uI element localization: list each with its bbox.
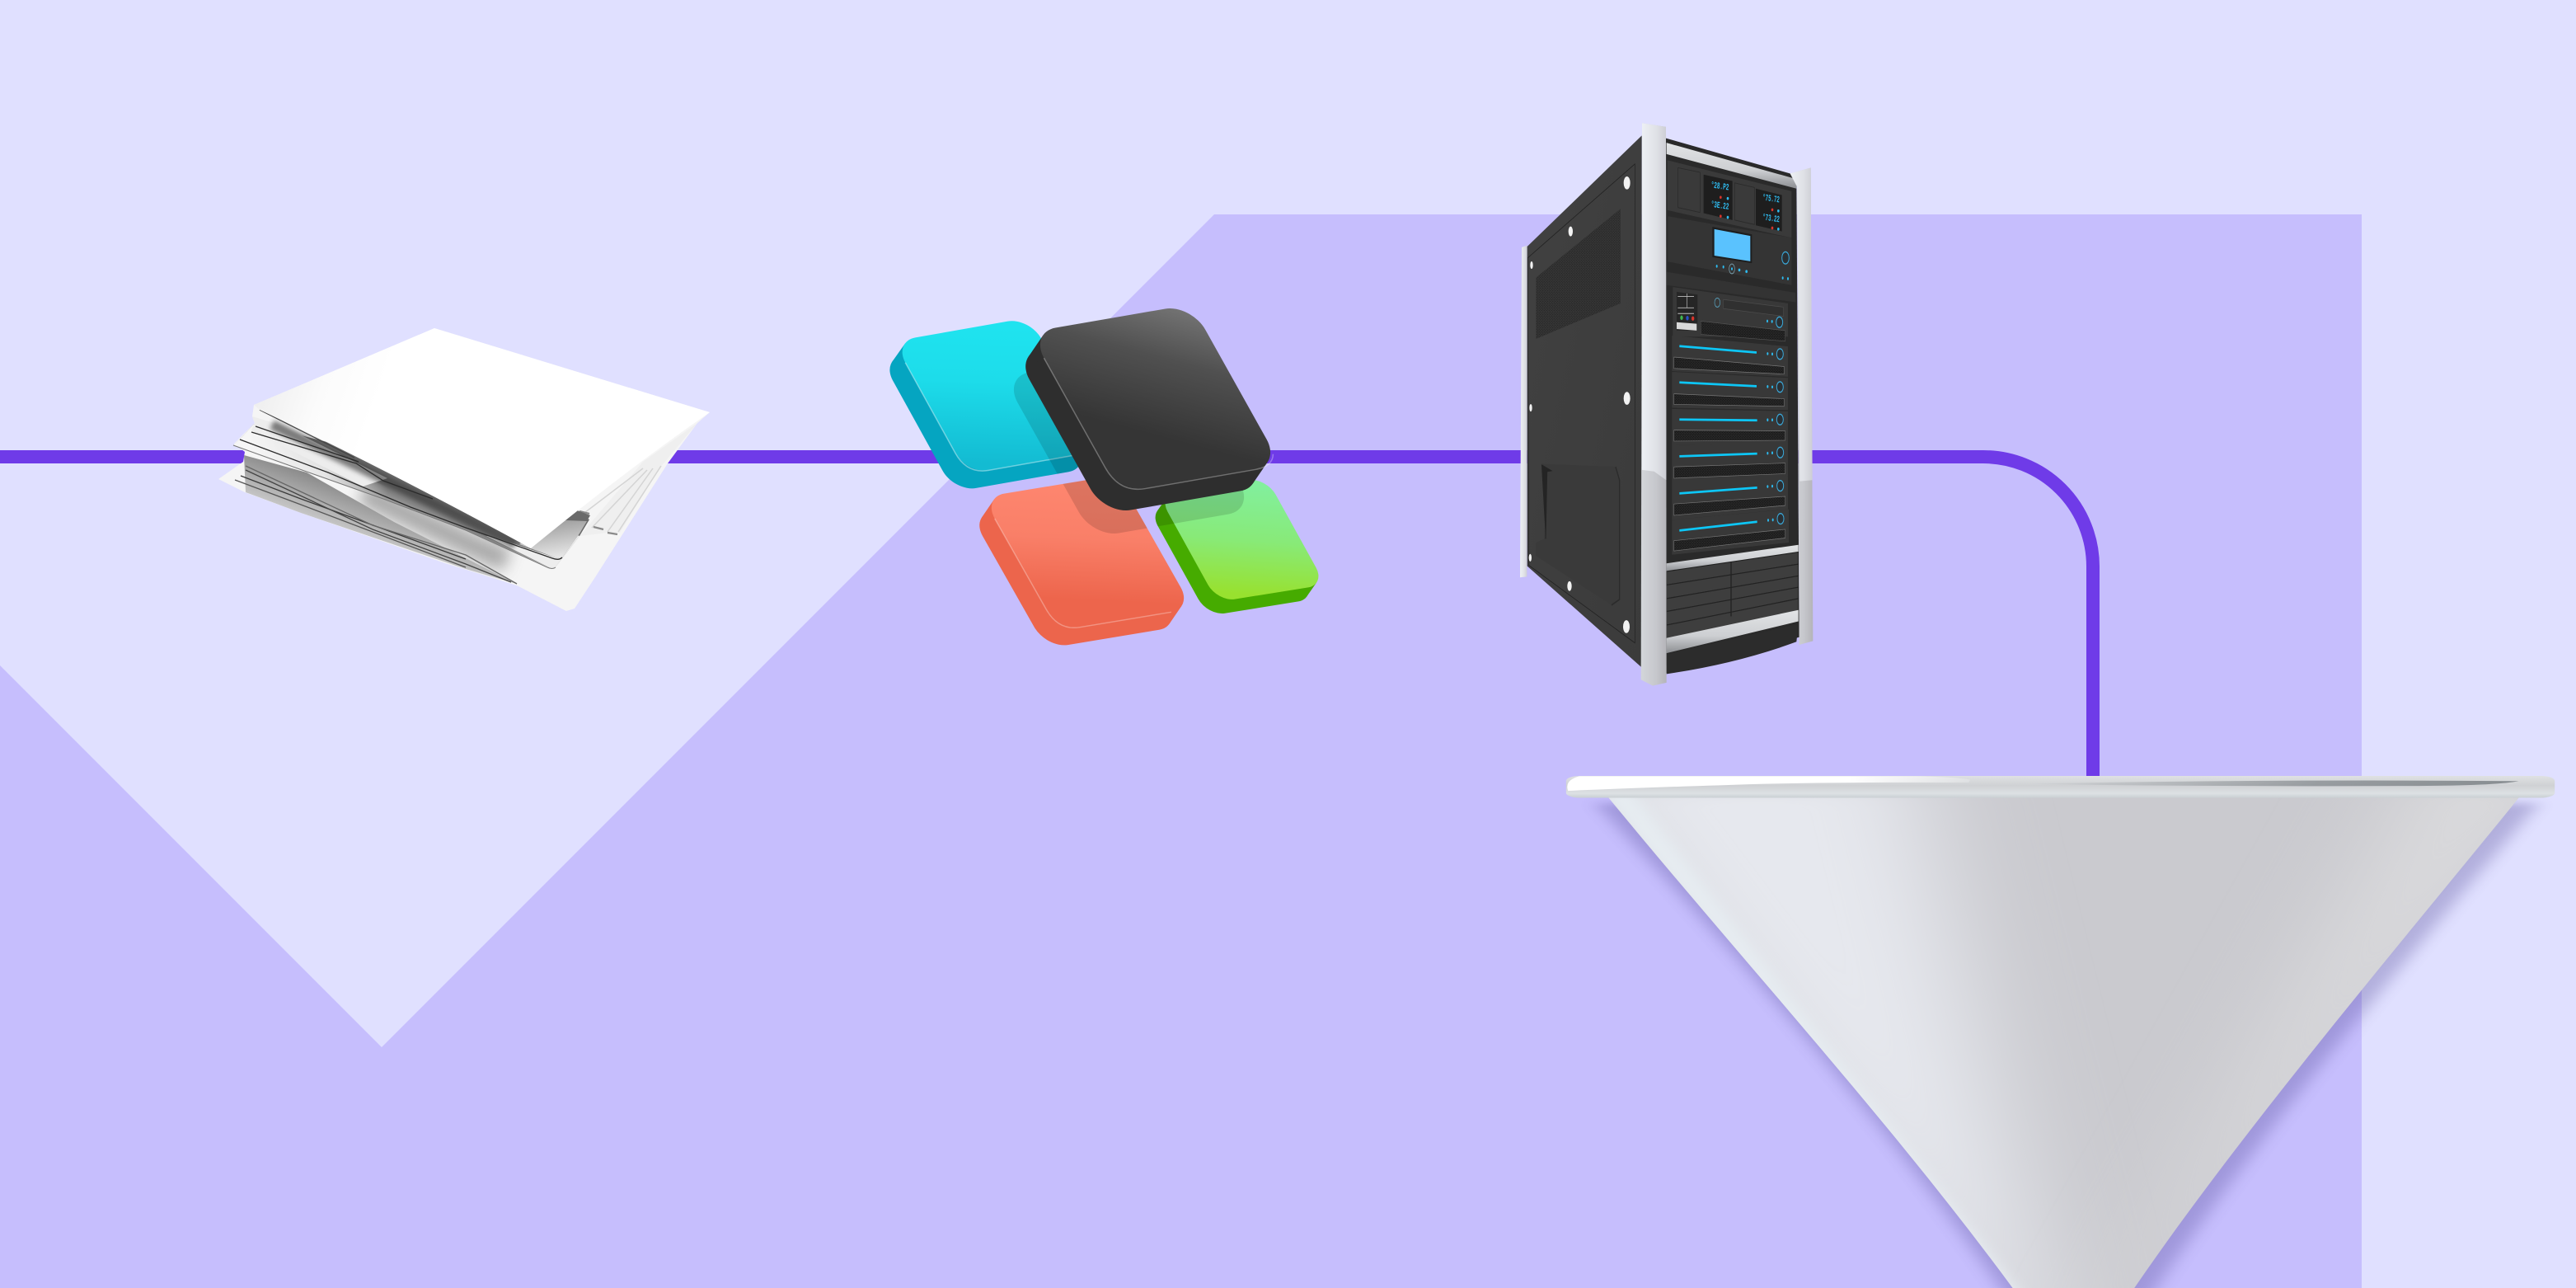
paper stack base silhouette	[218, 328, 710, 611]
LCD control panel	[1668, 216, 1791, 285]
rack base	[1667, 624, 1799, 674]
side panel inset border	[1527, 164, 1635, 643]
server blade 4	[1672, 443, 1788, 482]
orange tile	[963, 475, 1201, 648]
lower pack edge lines	[235, 466, 517, 584]
icon: funnel	[1566, 776, 2555, 1288]
server blade 1	[1672, 336, 1788, 377]
rack divider band	[1667, 272, 1795, 302]
cone right highlight	[2229, 798, 2518, 1158]
lower grey sheet pack	[244, 455, 517, 584]
server blade 3	[1672, 409, 1788, 445]
server blade 6	[1672, 510, 1789, 555]
background: violet zig-zag shape	[0, 214, 2362, 1288]
top paper sheet	[254, 328, 710, 548]
rim white highlight	[1567, 776, 1970, 791]
digital meter left	[1704, 175, 1733, 220]
cast shadow of the black tile	[1014, 373, 1244, 534]
pipeline connector line	[0, 457, 2093, 783]
digital meter left: °3E.22	[1710, 200, 1729, 212]
bottom silver bar	[1667, 610, 1799, 653]
shadow under the top sheet	[272, 425, 515, 544]
icon: server rack	[1520, 123, 1813, 686]
meter panel	[1668, 160, 1791, 237]
right side fanned sheets	[579, 423, 697, 536]
digital meter left: °28.P2	[1710, 180, 1729, 193]
rack rear pillar	[1520, 246, 1527, 577]
front right pillar	[1790, 167, 1813, 645]
rack side panel	[1527, 135, 1642, 668]
black tile	[1006, 304, 1291, 515]
lower silver bar	[1667, 545, 1799, 571]
cone left edge sheen	[1602, 794, 2025, 1288]
rim dark reflection	[2021, 781, 2519, 786]
front left pillar	[1641, 123, 1667, 686]
upper left stacked sheet tips	[251, 416, 387, 487]
funnel cast shadow	[1596, 803, 2538, 1288]
optical drive unit	[1673, 287, 1788, 341]
server blade 2	[1672, 372, 1788, 410]
embossed lower side panel	[1536, 464, 1620, 605]
funnel cone body	[1576, 784, 2551, 1288]
green tile	[1142, 477, 1332, 616]
stacked sheet edge lines	[233, 410, 562, 569]
side panel screws	[1529, 176, 1631, 633]
soft shadow on the bottom sheet	[363, 493, 507, 561]
front top silver bar	[1667, 143, 1796, 189]
icon: cluster of four coloured app tiles	[873, 304, 1332, 648]
icon: stack of paper documents	[218, 328, 710, 611]
cyan tile	[873, 317, 1111, 492]
cone left highlight	[1576, 784, 2048, 1288]
rack front chassis	[1666, 139, 1799, 673]
digital meter right: °73.22	[1762, 212, 1780, 225]
louvered intake vents	[1667, 552, 1799, 639]
digital meter right: °75.72	[1762, 192, 1780, 205]
server blade 5	[1672, 477, 1788, 519]
third paper sheet	[240, 424, 590, 558]
second paper sheet	[233, 424, 589, 569]
funnel rim	[1566, 776, 2555, 798]
side ventilation mesh	[1536, 209, 1621, 339]
digital meter right	[1756, 189, 1782, 232]
